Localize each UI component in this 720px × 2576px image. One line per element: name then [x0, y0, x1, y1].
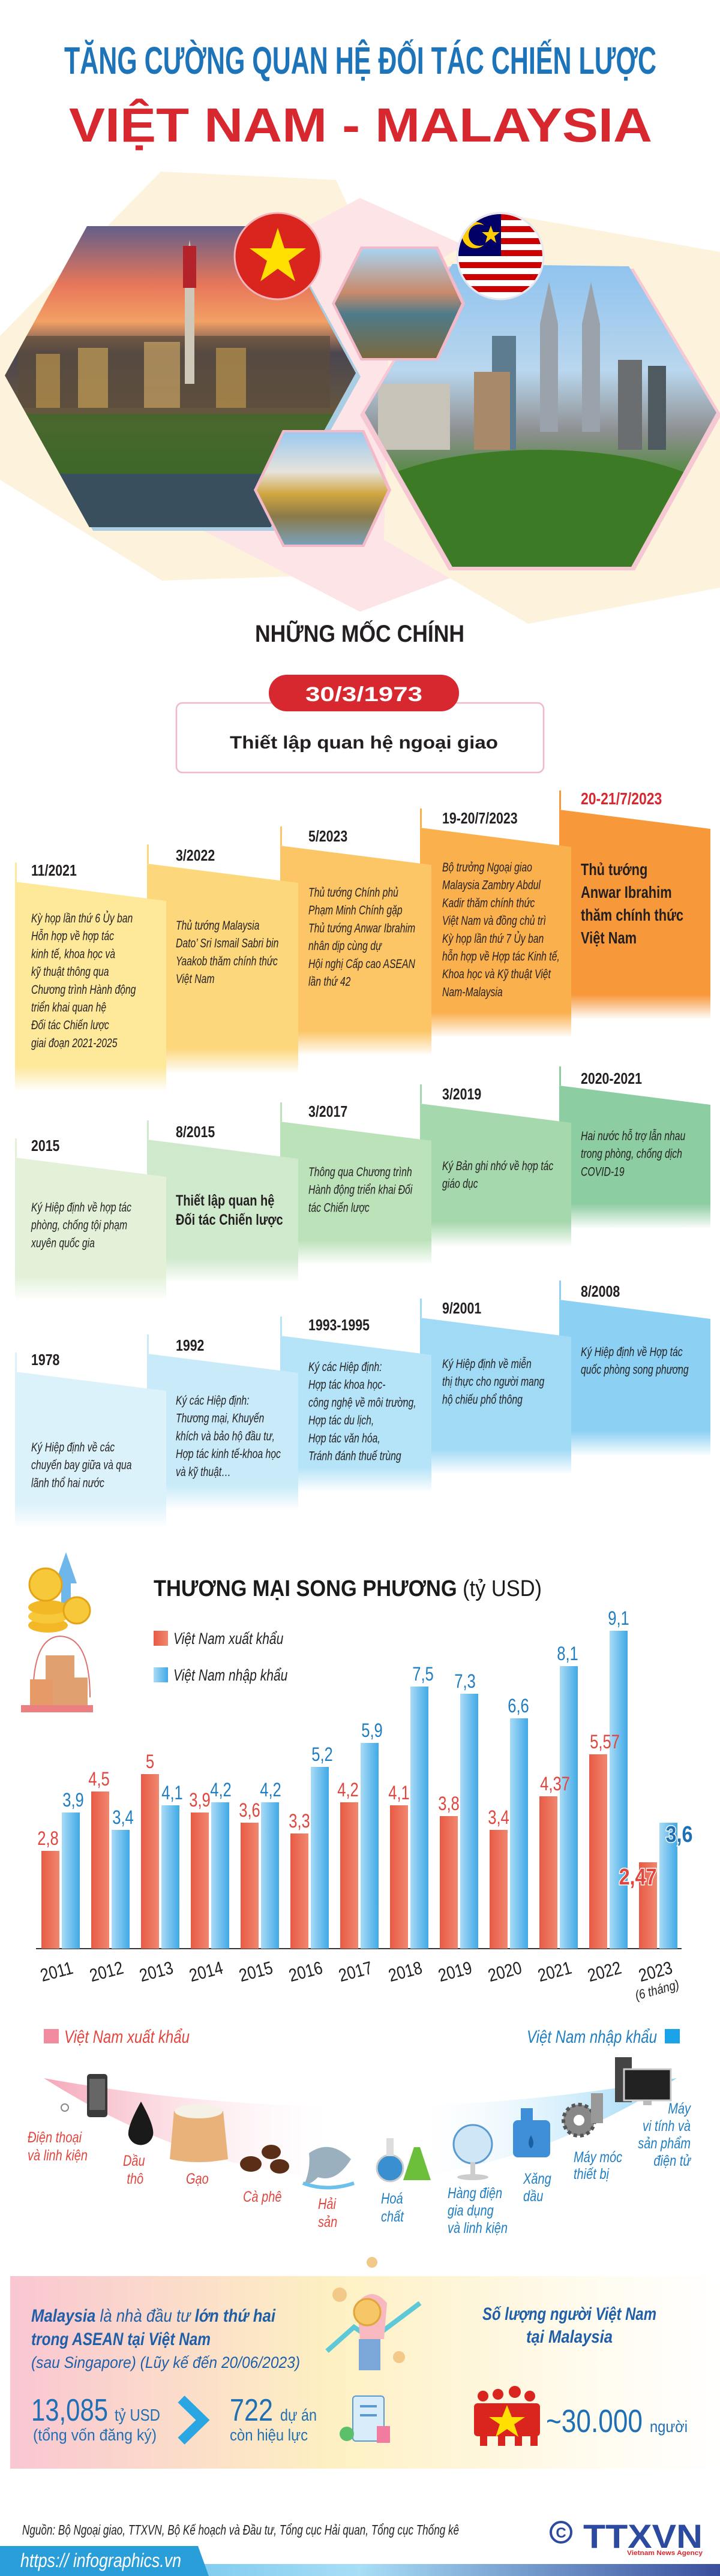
- logo: TTXVN: Vietnam News Agency: [627, 2550, 703, 2557]
- bar chart: bilateral trade: 2014: [187, 1958, 225, 1986]
- import products: điện tử: [653, 2153, 691, 2169]
- milestone 3/2017: tác Chiến lược: [308, 1200, 370, 1215]
- text: Malaysia second largest investor: (sau Singapore) (Lũy kế đến 20/06/2023): [31, 2353, 300, 2371]
- stat: projects: dự án: [280, 2406, 317, 2424]
- chart title: THƯƠNG MẠI SONG PHƯƠNG (tỷ USD): [154, 1576, 542, 1601]
- milestone 2020-2021: 2020-2021: [581, 1070, 642, 1088]
- import products: Xăng: [523, 2171, 551, 2187]
- text: Malaysia second largest investor: trong ASEAN tại Việt Nam: [31, 2329, 211, 2349]
- milestone 3/2017: Hành động triển khai Đối: [308, 1182, 413, 1197]
- milestone 1993-1995: [308, 1316, 416, 1463]
- stat: registered capital: [31, 2393, 160, 2444]
- bar chart: bilateral trade: 3,3: [289, 1811, 310, 1832]
- milestone 19-20/7/2023: Nam-Malaysia: [442, 985, 503, 999]
- milestone 5/2023: [308, 828, 415, 988]
- import products: vi tính và: [643, 2118, 691, 2135]
- import products: thiết bị: [574, 2166, 610, 2183]
- milestone 3/2022: Dato’ Sri Ismail Sabri bin: [176, 936, 278, 950]
- icon: computer: [615, 2057, 671, 2105]
- icon: clipboard: [340, 2396, 390, 2443]
- milestone 3/2017: 3/2017: [308, 1103, 347, 1121]
- milestone 2015: xuyên quốc gia: [31, 1236, 95, 1250]
- photo: Hoi An old town: [254, 430, 391, 547]
- photo: Malacca river: [332, 247, 465, 360]
- milestone 8/2015: Thiết lập quan hệ: [176, 1192, 274, 1209]
- bar chart: bilateral trade: 4,5: [88, 1769, 110, 1790]
- milestone 1978: chuyến bay giữa và qua: [31, 1457, 131, 1472]
- bar chart: bilateral trade: 9,1: [608, 1608, 629, 1630]
- icon: fuel jug: [513, 2108, 550, 2157]
- milestone 8/2008: 8/2008: [581, 1283, 620, 1301]
- milestone 8/2015: [176, 1123, 283, 1228]
- bar chart: bilateral trade: 4,1: [388, 1783, 410, 1804]
- import products: [377, 2057, 691, 2237]
- legend: exports / imports: Việt Nam xuất khẩu: [64, 2026, 190, 2047]
- milestone 1992: và kỹ thuật…: [176, 1465, 231, 1478]
- import products: dầu: [523, 2188, 544, 2205]
- bar chart: bilateral trade: 2018: [386, 1958, 424, 1986]
- bar chart: bilateral trade: 3,9: [189, 1790, 211, 1811]
- source note: Nguồn: Bộ Ngoại giao, TTXVN, Bộ Kế hoạch và Đầu tư, Tổng cục Hải quan, Tổng cục Thống kê: [22, 2522, 459, 2538]
- milestone 19-20/7/2023: [442, 810, 560, 999]
- import products: Hàng điện: [448, 2185, 502, 2202]
- bar chart: bilateral trade: 7,3: [454, 1671, 476, 1693]
- export products: Gạo: [186, 2171, 209, 2187]
- milestone 3/2022: [176, 847, 278, 986]
- text: Vietnamese in Malaysia: Số lượng người Việt Nam: [482, 2304, 656, 2324]
- export products: Cà phê: [243, 2189, 281, 2205]
- milestone 2020-2021: COVID-19: [581, 1164, 625, 1179]
- milestone 5/2023: Thủ tướng Anwar Ibrahim: [308, 921, 415, 935]
- milestone 8/2015: 8/2015: [176, 1123, 215, 1141]
- icon: rice sack: [170, 2104, 228, 2162]
- icon: Vietnam flag: [235, 213, 321, 299]
- milestone 19-20/7/2023: Khoa học và Kỹ thuật Việt: [442, 967, 551, 981]
- milestone 5/2023: nhân dịp cùng dự: [308, 939, 382, 953]
- milestone 3/2019: Ký Bản ghi nhớ về hợp tác: [442, 1159, 554, 1173]
- milestone 3/2019: 3/2019: [442, 1086, 481, 1104]
- icon: gear: [563, 2093, 603, 2136]
- export products: thô: [127, 2171, 143, 2187]
- milestone 1973 box: [176, 675, 544, 773]
- stat: projects: 722: [230, 2393, 273, 2428]
- 2023 highlighted values: 2,47: [619, 1865, 656, 1890]
- milestone 11/2021: Đối tác Chiến lược: [31, 1018, 109, 1032]
- milestone 2020-2021: Hai nước hỗ trợ lẫn nhau: [581, 1129, 685, 1143]
- hero photo collage: [0, 172, 720, 624]
- bar chart: bilateral trade: 2022: [586, 1958, 623, 1986]
- photo: Ho Chi Minh City skyline: [0, 222, 361, 534]
- title line 2: VIỆT NAM - MALAYSIA: [69, 98, 652, 152]
- milestone 1973 box: Thiết lập quan hệ ngoại giao: [230, 733, 498, 753]
- milestone 1993-1995: Hợp tác văn hóa,: [308, 1431, 380, 1445]
- bar chart: bilateral trade: 4,2: [337, 1780, 359, 1801]
- icon: oil drop: [128, 2102, 153, 2145]
- milestone 3/2022: Yaakob thăm chính thức: [176, 954, 278, 968]
- milestone 11/2021: triển khai quan hệ: [31, 1000, 106, 1014]
- milestone 3/2022: Việt Nam: [176, 972, 214, 986]
- bar chart: bilateral trade: 3,6: [239, 1800, 260, 1821]
- text: Vietnamese in Malaysia: [482, 2304, 656, 2347]
- import products: Hoá: [381, 2190, 403, 2207]
- milestone 3/2017: [308, 1103, 413, 1215]
- logo: TTXVN: [551, 2517, 703, 2557]
- milestone 5/2023: Phạm Minh Chính gặp: [308, 903, 403, 917]
- logo: TTXVN: C: [556, 2525, 566, 2541]
- icon: people with flag: [474, 2386, 540, 2446]
- milestone 1978: Ký Hiệp định về các: [31, 1440, 115, 1454]
- milestone 20-21/7/2023: Anwar Ibrahim: [581, 883, 672, 902]
- chart legend: [154, 1630, 287, 1685]
- milestone 20-21/7/2023: Việt Nam: [581, 928, 637, 948]
- milestone 9/2001: [442, 1300, 545, 1406]
- milestone 3/2019: giáo dục: [442, 1176, 478, 1191]
- bar chart: bilateral trade: 3,6: [666, 1822, 692, 1847]
- bar chart: bilateral trade: 3,8: [438, 1793, 460, 1815]
- bar chart: bilateral trade: 3,9: [62, 1790, 84, 1811]
- milestone 8/2008: quốc phòng song phương: [581, 1362, 689, 1376]
- bar chart: bilateral trade: 2015: [237, 1958, 275, 1986]
- milestone 1992: [176, 1337, 281, 1478]
- milestone 19-20/7/2023: Kadir thăm chính thức: [442, 895, 535, 910]
- milestone 20-21/7/2023: Thủ tướng: [581, 860, 647, 879]
- stat: 30,000 people: người: [650, 2418, 688, 2436]
- milestone 11/2021: kinh tế, khoa học và: [31, 946, 115, 961]
- icon: fan: [454, 2125, 492, 2180]
- milestone 1978: 1978: [31, 1351, 59, 1369]
- milestone 2020-2021: [581, 1070, 685, 1179]
- bar chart: bilateral trade: 2021: [536, 1958, 574, 1986]
- bar chart: bilateral trade: 2012: [88, 1958, 125, 1986]
- milestone 8/2008: Ký Hiệp định về Hợp tác: [581, 1345, 683, 1359]
- milestone 9/2001: Ký Hiệp định về miễn: [442, 1357, 532, 1371]
- milestone 20-21/7/2023: 20-21/7/2023: [581, 790, 662, 808]
- import products: và linh kiện: [448, 2220, 508, 2237]
- milestone 19-20/7/2023: Việt Nam và đồng chủ trì: [442, 913, 546, 928]
- stat: projects: còn hiệu lực: [230, 2426, 308, 2444]
- icon: coffee beans: [240, 2145, 289, 2174]
- milestone 20-21/7/2023: thăm chính thức: [581, 906, 683, 925]
- milestone 11/2021: Chương trình Hành động: [31, 982, 136, 996]
- milestone 20-21/7/2023: [581, 790, 683, 948]
- milestone 19-20/7/2023: 19-20/7/2023: [442, 810, 518, 828]
- milestone 1978: lãnh thổ hai nước: [31, 1475, 104, 1490]
- bar chart: bilateral trade: 6,6: [508, 1696, 529, 1717]
- bar chart: bilateral trade: 7,5: [412, 1664, 434, 1685]
- stat: 30,000 people: ~30.000: [546, 2403, 643, 2439]
- panel: investment and community: [10, 2257, 720, 2469]
- import products: chất: [381, 2208, 404, 2225]
- milestone 1973 box: 30/3/1973: [305, 683, 422, 706]
- bar chart: bilateral trade: 2,8: [37, 1828, 59, 1850]
- export products: Điện thoại: [28, 2129, 82, 2146]
- bar chart: bilateral trade: 2016: [287, 1958, 325, 1986]
- milestone 1992: khích và bảo hộ đầu tư,: [176, 1429, 275, 1443]
- milestone 1993-1995: Ký các Hiệp định:: [308, 1360, 382, 1374]
- bar chart: bilateral trade: 5,57: [590, 1732, 620, 1753]
- milestone 5/2023: lần thứ 42: [308, 974, 351, 988]
- milestone 2015: Ký Hiệp định về hợp tác: [31, 1200, 132, 1215]
- icon: hand holding coin: [327, 2257, 420, 2370]
- bar chart: bilateral trade: 3,4: [112, 1807, 134, 1829]
- milestone 3/2019: [442, 1086, 554, 1191]
- legend: exports / imports: Việt Nam nhập khẩu: [527, 2026, 657, 2047]
- milestone 9/2001: thị thực cho người mang: [442, 1374, 545, 1388]
- milestone 11/2021: kỹ thuật thông qua: [31, 964, 109, 979]
- bar chart: bilateral trade: 4,2: [210, 1780, 232, 1801]
- bar chart: bilateral trade: 2013: [137, 1958, 175, 1986]
- milestone 5/2023: Hội nghị Cấp cao ASEAN: [308, 957, 415, 970]
- bar chart: bilateral trade: 5,2: [311, 1744, 333, 1766]
- bar chart: bilateral trade: 4,37: [540, 1774, 570, 1795]
- milestone 11/2021: [31, 862, 136, 1050]
- arrow: [181, 2399, 203, 2441]
- milestone 9/2001: hộ chiếu phổ thông: [442, 1392, 523, 1406]
- bar chart: bilateral trade: 8,1: [557, 1643, 578, 1665]
- footer bar: [0, 2546, 720, 2576]
- milestone 8/2008: [581, 1283, 689, 1376]
- milestone 2015: 2015: [31, 1137, 59, 1155]
- export products: Dầu: [123, 2153, 145, 2169]
- chart legend: Việt Nam xuất khẩu: [173, 1630, 283, 1648]
- legend: exports / imports: [44, 2026, 680, 2047]
- milestone 11/2021: Kỳ họp lần thứ 6 Ủy ban: [31, 911, 133, 925]
- timeline row 1 (2021-2023): [15, 790, 710, 1092]
- text: Malaysia second largest investor: Malaysia là nhà đầu tư lớn thứ hai: [31, 2306, 276, 2326]
- chart legend: Việt Nam nhập khẩu: [173, 1667, 287, 1685]
- stat: registered capital: tỷ USD: [115, 2406, 160, 2424]
- milestone 11/2021: Hỗn hợp về hợp tác: [31, 928, 115, 943]
- milestone 8/2015: Đối tác Chiến lược: [176, 1212, 283, 1228]
- bar chart: bilateral trade: [36, 1608, 692, 2003]
- import products: Máy móc: [574, 2149, 623, 2166]
- milestone 2015: [31, 1137, 132, 1250]
- timeline row 2 (2015-2021): [15, 1066, 710, 1301]
- bar chart: bilateral trade: (6 tháng): [634, 1978, 681, 2003]
- milestone 1992: Ký các Hiệp định:: [176, 1393, 249, 1408]
- import products: gia dụng: [448, 2202, 494, 2219]
- stat: projects: [230, 2393, 317, 2444]
- bar chart: bilateral trade: 2019: [436, 1958, 474, 1986]
- milestone 19-20/7/2023: hỗn hợp về Hợp tác Kinh tế,: [442, 949, 560, 963]
- heading: milestones: NHỮNG MỐC CHÍNH: [255, 620, 464, 647]
- footer bar: https:// infographics.vn: [20, 2550, 181, 2571]
- bar chart: bilateral trade: 5: [146, 1751, 154, 1773]
- logo: TTXVN: TTXVN: [583, 2517, 703, 2555]
- icon: chemical flasks: [377, 2138, 431, 2181]
- milestone 2015: phòng, chống tội phạm: [31, 1218, 127, 1232]
- milestone 19-20/7/2023: Bộ trưởng Ngoại giao: [442, 860, 532, 874]
- bar chart: bilateral trade: 2011: [38, 1958, 75, 1985]
- icon: phone: [61, 2074, 107, 2117]
- milestone 3/2017: Thông qua Chương trình: [308, 1165, 412, 1179]
- milestone 3/2022: Thủ tướng Malaysia: [176, 918, 259, 933]
- bar chart: bilateral trade: 2023: [637, 1958, 674, 1986]
- milestone 11/2021: giai đoạn 2021-2025: [31, 1036, 118, 1050]
- photo: Kuala Lumpur skyline: [348, 264, 720, 582]
- milestone 2020-2021: trong phòng, chống dịch: [581, 1146, 682, 1161]
- milestone 1993-1995: 1993-1995: [308, 1316, 370, 1334]
- milestone 1992: 1992: [176, 1337, 204, 1355]
- milestone 3/2022: 3/2022: [176, 847, 215, 865]
- timeline row 3 (1978-2008): [15, 1281, 710, 1528]
- bar chart: bilateral trade: 4,1: [161, 1783, 183, 1804]
- milestone 9/2001: 9/2001: [442, 1300, 481, 1318]
- products arc band: [44, 2078, 677, 2178]
- milestone 19-20/7/2023: Malaysia Zambry Abdul: [442, 877, 541, 892]
- milestone 11/2021: 11/2021: [31, 862, 77, 880]
- text: Vietnamese in Malaysia: tại Malaysia: [526, 2327, 613, 2347]
- export products: [28, 2074, 354, 2231]
- bar chart: bilateral trade: 2017: [337, 1958, 374, 1986]
- icon: coins and boxes: [21, 1552, 93, 1712]
- icon: Malaysia flag: [456, 213, 546, 299]
- export products: và linh kiện: [28, 2147, 88, 2164]
- milestone 1993-1995: Hợp tác khoa học-: [308, 1377, 385, 1391]
- export products: Hải: [318, 2196, 337, 2213]
- stat: registered capital: (tổng vốn đăng ký): [33, 2426, 157, 2444]
- milestone 1993-1995: công nghệ về môi trường,: [308, 1395, 416, 1409]
- milestone 1993-1995: Tránh đánh thuế trùng: [308, 1448, 401, 1463]
- bar chart: bilateral trade: 4,2: [260, 1780, 281, 1801]
- milestone 19-20/7/2023: Kỳ họp lần thứ 7 Ủy ban: [442, 931, 544, 945]
- export products: sản: [318, 2214, 337, 2231]
- bar chart: bilateral trade: 3,4: [488, 1807, 509, 1829]
- icon: fish: [303, 2147, 354, 2188]
- stat: registered capital: 13,085: [31, 2393, 108, 2428]
- bar chart: bilateral trade: 2020: [486, 1958, 524, 1986]
- text: Malaysia second largest investor: [31, 2306, 300, 2371]
- import products: sản phẩm: [638, 2135, 691, 2152]
- milestone 1992: Thương mại, Khuyến: [176, 1411, 264, 1425]
- import products: Máy: [668, 2100, 691, 2117]
- milestone 5/2023: 5/2023: [308, 828, 347, 846]
- milestone 1978: [31, 1351, 131, 1490]
- milestone 1992: Hợp tác kinh tế-khoa học: [176, 1447, 281, 1461]
- milestone 5/2023: Thủ tướng Chính phủ: [308, 885, 398, 900]
- bar chart: bilateral trade: 5,9: [361, 1720, 383, 1742]
- milestone 1993-1995: Hợp tác du lịch,: [308, 1413, 374, 1427]
